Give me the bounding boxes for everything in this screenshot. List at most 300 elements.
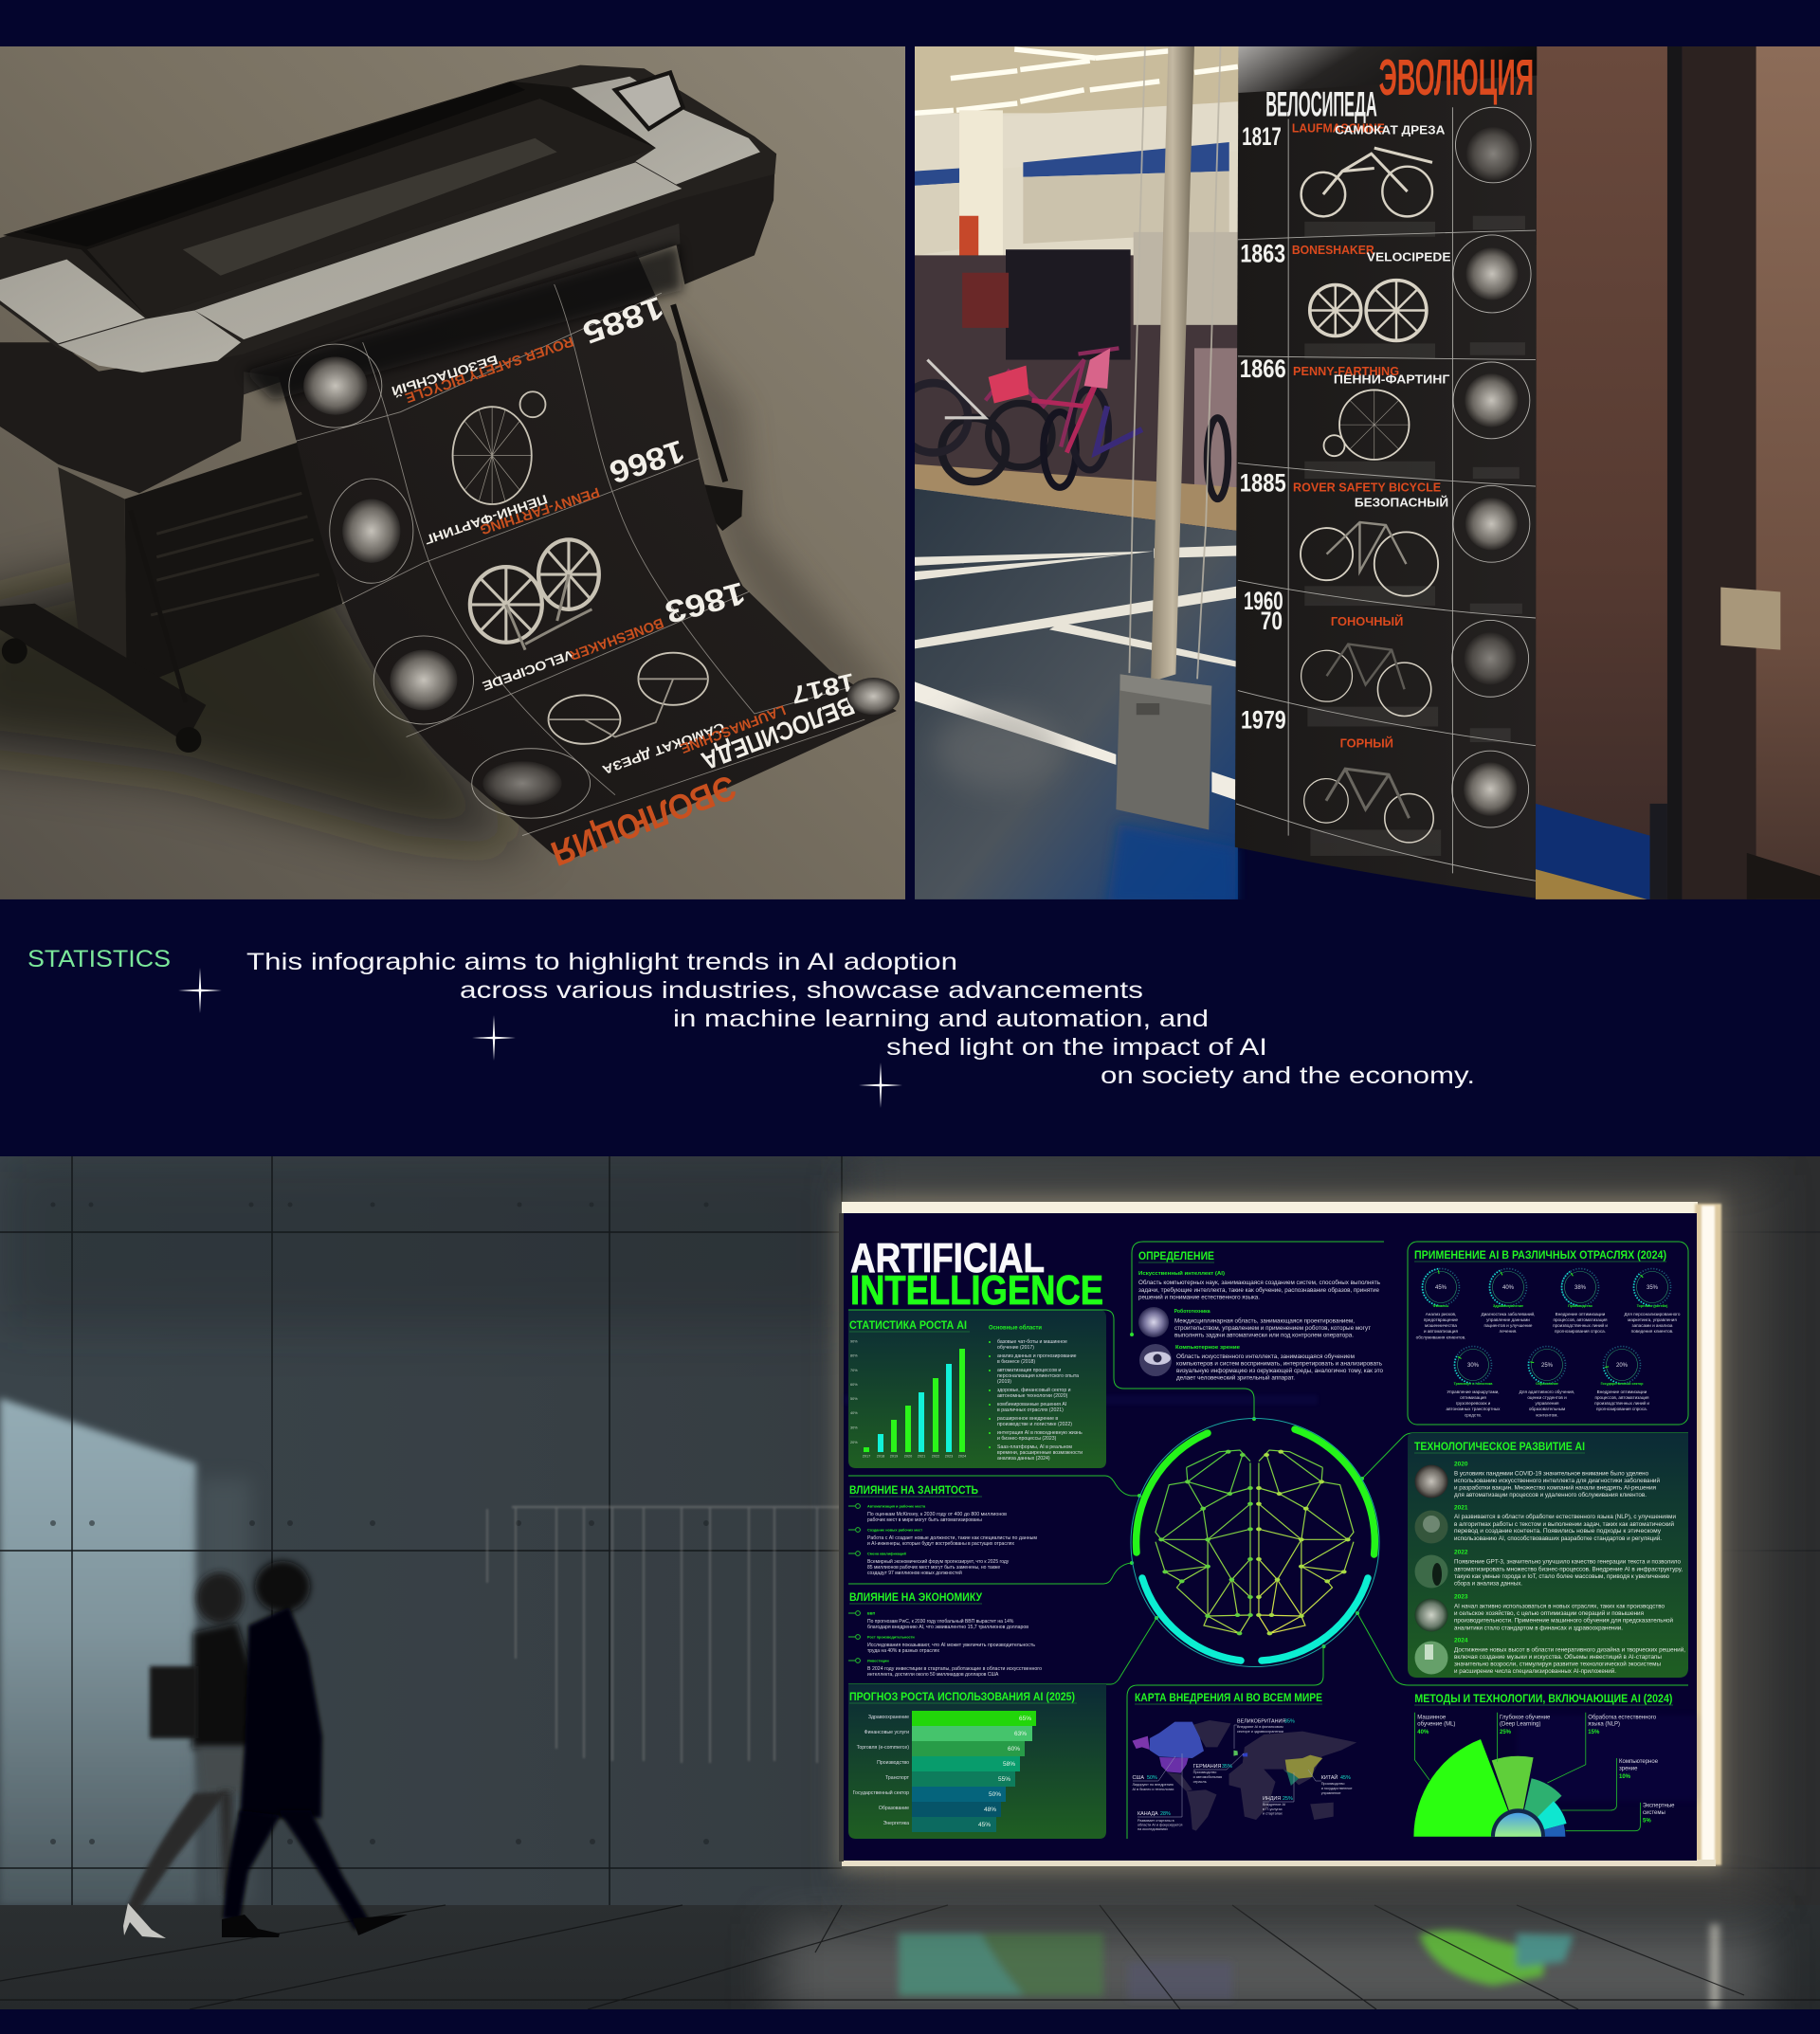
timeline text: и расширение числа специализированных AI-приложений. xyxy=(1454,1668,1616,1675)
panel: AI usage forecast bars: 65% xyxy=(1019,1716,1031,1722)
panel: world adoption map: и государственное xyxy=(1321,1787,1353,1790)
bar chart: 40% xyxy=(850,1411,858,1415)
panel: definition: задачи, требующие интеллекта, такие как обучение, распознавание образов, принятие xyxy=(1138,1286,1379,1294)
timeline text: и сельское хозяйство, с целью оптимизации операций и повышения xyxy=(1454,1610,1644,1617)
chart leader lines xyxy=(1414,1713,1640,1831)
panel: world adoption map: в IT-услугах xyxy=(1263,1807,1283,1811)
gauge descriptions: производственных линий и xyxy=(1553,1322,1608,1328)
gauge: government 20%: 20% xyxy=(1616,1363,1629,1369)
bar chart: 2022 xyxy=(932,1454,939,1458)
panel: definition: строительством, управлением и применением роботов, которые могут xyxy=(1174,1324,1371,1332)
key areas list: базовые чат-боты и машинное xyxy=(997,1339,1067,1345)
panel: AI usage forecast bars: 55% xyxy=(998,1776,1010,1783)
store walls and shelves xyxy=(959,110,1003,258)
bar chart: 2024 xyxy=(958,1454,966,1458)
chart labels: Глубокое обучение xyxy=(1500,1716,1551,1721)
gauge descriptions: процессов, автоматизация xyxy=(1553,1317,1608,1322)
light drip streaks xyxy=(487,1507,842,1763)
panel: world adoption map: и стартапах xyxy=(1263,1812,1283,1816)
gauge labels: Образование xyxy=(1536,1382,1558,1386)
section: impact on employment: ВЛИЯНИЕ НА ЗАНЯТОСТЬ xyxy=(849,1485,978,1497)
gauge descriptions: управления xyxy=(1535,1401,1559,1406)
panel: definition: компьютеров и систем воспринимать, интерпретировать и анализировать xyxy=(1176,1361,1383,1368)
fan chart xyxy=(1413,1739,1567,1837)
timeline text: В условиях пандемии COVID-19 значительное внимание было уделено xyxy=(1454,1471,1649,1478)
section: impact on economy: В 2024 году инвестиции в стартапы, работающие в области искусственного xyxy=(867,1666,1042,1672)
panel: definition: делает человеческий зрительный аппарат. xyxy=(1176,1374,1295,1382)
panel: AI methods and technologies: МЕТОДЫ И ТЕХНОЛОГИИ, ВКЛЮЧАЮЩИЕ AI (2024) xyxy=(1414,1694,1673,1705)
panel: definition: ОПРЕДЕЛЕНИЕ xyxy=(1138,1251,1214,1262)
gauge: healthcare 40%: 40% xyxy=(1502,1285,1515,1291)
panel: definition: Междисциплинарная область, занимающаяся проектированием, xyxy=(1174,1317,1355,1325)
key areas list: персонализация клиентского опыта xyxy=(997,1373,1079,1379)
man xyxy=(222,1561,408,1937)
photo: large format printer with poster: BONESHAKER xyxy=(567,614,665,663)
timeline text: использованию AI, способствовавших разработке стандартов и регуляций. xyxy=(1454,1535,1662,1542)
section: impact on employment: Смена квалификаций xyxy=(867,1553,907,1556)
photo: large format printer with poster: ЭВОЛЮЦИЯ xyxy=(546,768,741,874)
wall tie holes xyxy=(50,1202,709,1844)
bar chart: 2018 xyxy=(877,1454,884,1458)
standing poster title xyxy=(1265,49,1534,123)
timeline text: в алгоритмах работы с текстом и выполнении задач, таких как автоматический xyxy=(1454,1521,1675,1528)
panel: AI usage forecast bars: Транспорт xyxy=(885,1775,910,1781)
gauge: manufacturing 38%: 38% xyxy=(1574,1285,1587,1291)
timeline text: значительно возросли, стимулируя развитие технологической экосистемы xyxy=(1454,1662,1662,1668)
section: impact on employment xyxy=(848,1485,1038,1576)
gauge: healthcare 40% xyxy=(1489,1268,1526,1306)
brain network xyxy=(1156,1450,1354,1635)
panel: world adoption map: Внедрение AI xyxy=(1263,1803,1285,1807)
gauge descriptions: управление данными xyxy=(1486,1317,1530,1322)
security gate pole xyxy=(1151,46,1194,681)
section: impact on employment: 85 миллионов рабочих мест могут быть заменены, но также xyxy=(867,1565,1000,1571)
panel: AI methods and technologies: 40% xyxy=(1417,1730,1429,1735)
timeline years: 2020 xyxy=(1454,1462,1468,1468)
gauge descriptions: поведения клиентов. xyxy=(1631,1329,1673,1334)
panel: world adoption map: 35% xyxy=(1284,1719,1295,1725)
gauge descriptions: и автоматизация xyxy=(1424,1329,1458,1334)
standing poster years: 1866 xyxy=(1240,354,1286,383)
standing poster title: ЭВОЛЮЦИЯ xyxy=(1379,49,1534,106)
panel: AI usage forecast bars xyxy=(848,1684,1106,1839)
panel: technological development timeline xyxy=(1408,1433,1688,1678)
printer touch screen xyxy=(615,73,683,129)
staggered introduction text: on society and the economy. xyxy=(1101,1062,1475,1089)
section: impact on employment: Автоматизация и рабочие места xyxy=(867,1505,926,1509)
photo: poster installed at bicycle shop entrance xyxy=(899,46,1820,905)
wall socket xyxy=(1720,588,1780,650)
timeline years: 2023 xyxy=(1454,1593,1468,1600)
key areas list xyxy=(989,1325,1083,1462)
brain diagram xyxy=(1131,1418,1379,1666)
panel: world adoption map: Производство xyxy=(1193,1771,1216,1774)
rotated poster headings: БЕЗОПАСНЫЙ xyxy=(390,353,500,398)
panel: world adoption map: Внедряют AI в финансовом xyxy=(1237,1725,1283,1729)
panel: AI usage forecast bars: 60% xyxy=(1008,1746,1020,1753)
section: impact on economy: интеллекта, достигли около 50 миллиардов долларов США xyxy=(867,1672,999,1678)
bar chart: 80% xyxy=(850,1353,858,1357)
panel: world adoption map: секторе и здравоохранении xyxy=(1237,1730,1283,1734)
map leader lines xyxy=(1133,1725,1321,1817)
panel: AI usage forecast bars: Государственный сектор xyxy=(853,1789,909,1796)
AI poster xyxy=(844,1213,1697,1861)
woman xyxy=(123,1572,261,1938)
rotated poster headings: 1866 xyxy=(605,432,688,490)
standing poster years: 70 xyxy=(1261,607,1283,635)
section: impact on employment: и AI-инженеры, которые будут востребованы в растущих отраслях xyxy=(867,1541,1014,1547)
gauge descriptions: процессов, автоматизация xyxy=(1594,1395,1649,1400)
panel: AI methods and technologies: 15% xyxy=(1588,1730,1600,1735)
standing poster bicycles xyxy=(1301,148,1438,843)
photo: large format printer with poster: PENNY-FARTHING xyxy=(478,483,601,536)
gauge descriptions: образовательным xyxy=(1529,1407,1565,1411)
section: impact on economy: По прогнозам PwC, к 2030 году глобальный ВВП вырастет на 14% xyxy=(867,1618,1014,1625)
staggered introduction text xyxy=(246,949,1475,1089)
rotated poster headings: 1863 xyxy=(662,574,749,629)
standing poster years: 1817 xyxy=(1242,122,1282,151)
rotated poster headings xyxy=(390,289,858,777)
staggered introduction text: in machine learning and automation, and xyxy=(673,1006,1209,1032)
chart labels: (Deep Learning) xyxy=(1500,1722,1540,1728)
standing poster years: 1885 xyxy=(1240,469,1286,498)
standing poster years: 1960 xyxy=(1244,587,1283,615)
photo: large format printer with poster: LAUFMASCHINE xyxy=(678,701,788,755)
window light patch xyxy=(0,1398,196,1905)
standing poster bicycle names: VELOCIPEDE xyxy=(1367,249,1451,263)
map labels: США xyxy=(1132,1775,1144,1781)
chart labels: Обработка естественного xyxy=(1588,1716,1657,1721)
label: statistics: STATISTICS xyxy=(27,946,171,972)
key areas list: (2019) xyxy=(997,1379,1011,1385)
panel: definition: Область компьютерных наук, занимающаяся созданием систем, способных выполнять xyxy=(1138,1279,1381,1286)
section: impact on employment: рабочих мест в мире могут быть автоматизированы xyxy=(867,1517,982,1523)
map labels: ГЕРМАНИЯ xyxy=(1193,1764,1222,1770)
section: impact on economy xyxy=(848,1592,1042,1678)
gauge descriptions: Внедрение оптимизации xyxy=(1556,1312,1606,1317)
key areas list: времени, расширенные возможности xyxy=(997,1450,1083,1456)
photo: illuminated AI poster on concrete wall xyxy=(0,1156,1820,2019)
key areas list: анализ данных и прогнозирование xyxy=(997,1353,1077,1359)
panel: world adoption map: 45% xyxy=(1340,1775,1351,1781)
thick green arcs xyxy=(1137,1429,1374,1554)
map labels: ВЕЛИКОБРИТАНИЯ xyxy=(1237,1719,1285,1725)
timeline text: AI начал активно использоваться в новых отраслях, таких как производство xyxy=(1454,1604,1665,1610)
bar chart: 2023 xyxy=(945,1454,953,1458)
gauge labels xyxy=(1433,1304,1668,1386)
gauge: education 25% xyxy=(1528,1346,1566,1384)
poster bicycle wheels xyxy=(453,391,708,744)
store floor and markings xyxy=(915,464,1238,531)
gauge: retail 35% xyxy=(1633,1268,1670,1306)
gauge descriptions: Анализ рисков, xyxy=(1426,1312,1456,1317)
store ceiling and lights xyxy=(910,46,1241,113)
gauge descriptions: запасами и анализа xyxy=(1632,1323,1673,1328)
gauge descriptions: автономных транспортных xyxy=(1447,1407,1501,1411)
gauge labels: Транспорт и логистика xyxy=(1454,1382,1493,1386)
panel: world adoption map: на исследованиях xyxy=(1138,1827,1168,1831)
panel: AI across industries 2024: ПРИМЕНЕНИЕ AI В РАЗЛИЧНЫХ ОТРАСЛЯХ (2024) xyxy=(1414,1250,1666,1262)
map labels: КИТАЙ xyxy=(1321,1773,1338,1781)
panel: AI usage forecast bars: Энергетика xyxy=(883,1821,909,1826)
gauge labels: Производство xyxy=(1568,1304,1593,1308)
icon: robot photo xyxy=(1138,1307,1169,1337)
gauge descriptions: прогнозирования спроса. xyxy=(1596,1407,1647,1411)
standing poster bicycle names: БЕЗОПАСНЫЙ xyxy=(1355,495,1448,509)
standing poster xyxy=(1235,46,1537,899)
section: impact on economy: ВЛИЯНИЕ НА ЭКОНОМИКУ xyxy=(849,1592,983,1604)
gauge labels: Здравоохранение xyxy=(1493,1304,1523,1308)
gauge descriptions: обслуживания клиентов. xyxy=(1416,1335,1465,1340)
gauge descriptions: оптимизация xyxy=(1460,1395,1486,1400)
timeline text: автоматизировать множество бизнес-процессов. Внедрение AI в инфраструктуру, xyxy=(1454,1566,1683,1572)
standing poster bicycle names: ГОНОЧНЫЙ xyxy=(1331,614,1403,628)
gauge descriptions: прогнозирования спроса. xyxy=(1555,1329,1606,1334)
panel: definition xyxy=(1138,1251,1383,1382)
poster rules xyxy=(296,284,864,836)
panel: world adoption map: 50% xyxy=(1147,1775,1157,1781)
section: impact on economy: Инвестиции xyxy=(867,1659,889,1662)
bar chart: 60% xyxy=(850,1383,858,1387)
key areas list: Основные области xyxy=(989,1325,1042,1331)
icon: sparkle star xyxy=(859,1062,902,1108)
panel: definition: Компьютерное зрение xyxy=(1175,1345,1240,1351)
key areas list: интеграция AI в повседневную жизнь xyxy=(997,1430,1083,1436)
standing poster bicycle names: BONESHAKER xyxy=(1292,243,1374,257)
gauge: retail 35%: 35% xyxy=(1647,1285,1659,1291)
bar chart: 20% xyxy=(850,1441,858,1444)
gauge descriptions: Диагностика заболеваний, xyxy=(1482,1311,1535,1317)
timeline text: аналитики стало стандартом в финансах и здравоохранении. xyxy=(1454,1625,1623,1631)
gauge: transport 30% xyxy=(1454,1346,1492,1384)
panel: world adoption map: Производство xyxy=(1321,1782,1344,1786)
outer ring xyxy=(1131,1418,1379,1666)
bar chart: 2020 xyxy=(904,1454,912,1458)
timeline text: такую как умные города и IoT, стало более массовым, приводя к увеличению xyxy=(1454,1573,1669,1580)
panel: world adoption map: 28% xyxy=(1160,1811,1171,1817)
standing poster years xyxy=(1240,122,1286,734)
bar chart: 50% xyxy=(850,1397,858,1401)
section: impact on employment: Всемирный экономический форум прогнозирует, что к 2025 году xyxy=(867,1558,1010,1565)
section: impact on employment: создадут 97 миллионов новых должностей xyxy=(867,1570,962,1576)
poster title xyxy=(850,1235,1103,1314)
panel: definition: Робототехника xyxy=(1174,1308,1210,1315)
staggered introduction text: across various industries, showcase advancements xyxy=(460,977,1143,1004)
gauge descriptions: лечения. xyxy=(1500,1329,1517,1334)
gauge descriptions: мошенничества xyxy=(1425,1323,1457,1328)
timeline text: производительности. Применение машинного обучения для предсказательной xyxy=(1454,1618,1674,1625)
panel: definition: Область искусственного интеллекта, занимающаяся обучением xyxy=(1176,1353,1355,1360)
timeline text: Достижение новых высот в области генеративного дизайна и творческих решений, xyxy=(1454,1646,1685,1653)
panel: world adoption map: области AI и фокусируется xyxy=(1138,1824,1182,1827)
rotated poster headings: VELOCIPEDE xyxy=(481,647,575,693)
walking couple silhouettes xyxy=(123,1561,408,1938)
panel: AI methods and technologies: 10% xyxy=(1619,1774,1631,1780)
icon: eye photo xyxy=(1139,1344,1172,1376)
gauge descriptions: Для адаптивного обучения, xyxy=(1520,1389,1574,1394)
bar chart xyxy=(850,1340,966,1458)
standing poster bicycle names: LAUFMASCHINE xyxy=(1292,121,1385,136)
chart labels: языка (NLP) xyxy=(1588,1722,1620,1728)
gauge descriptions: предотвращение xyxy=(1424,1317,1459,1322)
standing poster bicycle names: ROVER SAFETY BICYCLE xyxy=(1293,481,1442,495)
panel: AI methods and technologies: 25% xyxy=(1500,1730,1512,1735)
printer stand xyxy=(125,441,342,681)
printer lid xyxy=(3,82,656,318)
gauge descriptions: средств. xyxy=(1465,1412,1482,1418)
rotated poster headings: САМОКАТ ДРЕЗА xyxy=(600,719,726,777)
rotated poster headings: 1817 xyxy=(789,667,858,708)
children's bicycles xyxy=(899,348,1228,499)
gauge descriptions: контентом. xyxy=(1536,1412,1558,1418)
panel: definition: решений и понимание естественного языка. xyxy=(1138,1294,1260,1301)
timeline years: 2024 xyxy=(1454,1637,1468,1644)
key areas list: в бизнесе (2018) xyxy=(997,1359,1035,1365)
panel: world adoption map: Развивает стартапы в xyxy=(1138,1819,1174,1823)
gauge: transport 30%: 30% xyxy=(1467,1363,1480,1369)
panel: AI usage forecast bars: Производство xyxy=(877,1760,909,1766)
gauge descriptions: Для персонализированного xyxy=(1625,1312,1681,1317)
panel: AI usage forecast bars: Здравоохранение xyxy=(868,1715,909,1720)
key areas list: производстве и логистике (2022) xyxy=(997,1422,1072,1427)
key areas list: в различных отраслях (2021) xyxy=(997,1407,1064,1413)
panel: AI usage forecast bars: 45% xyxy=(978,1822,991,1828)
standing poster years: 1863 xyxy=(1240,240,1285,268)
panel: AI growth statistics xyxy=(848,1310,1106,1468)
bar chart: 2019 xyxy=(890,1454,898,1458)
timeline photos xyxy=(1414,1465,1448,1674)
panel: AI usage forecast bars: Финансовые услуги xyxy=(864,1730,909,1735)
gauge descriptions: производственных линий и xyxy=(1594,1400,1649,1406)
printer grey panels xyxy=(0,260,145,343)
heading: СТАТИСТИКА РОСТА AI xyxy=(849,1320,967,1332)
poster title: ARTIFICIAL xyxy=(850,1235,1045,1281)
section: impact on economy: Исследования показывают, что AI может увеличить производительность xyxy=(867,1643,1035,1648)
rotated poster headings: ПЕННИ-ФАРТИНГ xyxy=(423,492,549,547)
photo: large format printer with poster: ROVER SAFETY BICYCLE xyxy=(403,333,575,405)
chart labels: обучение (ML) xyxy=(1417,1722,1455,1728)
panel: world adoption map: AI в бизнес и технологии xyxy=(1132,1788,1174,1791)
panel: AI usage forecast bars: 63% xyxy=(1014,1731,1027,1737)
panel: definition: Искусственный интеллект (AI) xyxy=(1138,1270,1225,1277)
panel: world adoption map: Лидируют по внедрению xyxy=(1132,1783,1174,1787)
rotated poster headings: 1885 xyxy=(578,289,668,350)
section: impact on economy: труда на 40% в разных отраслях xyxy=(867,1648,939,1654)
panel: world adoption map xyxy=(1132,1693,1356,1831)
panel: AI usage forecast bars: 48% xyxy=(984,1807,996,1813)
map labels xyxy=(1132,1719,1338,1817)
staggered introduction text: shed light on the impact of AI xyxy=(886,1034,1267,1061)
standing poster title: ВЕЛОСИПЕДА xyxy=(1265,84,1377,123)
key areas list: здоровье, финансовый сектор и xyxy=(997,1387,1071,1393)
wall panel seams xyxy=(0,1156,1820,1905)
poster light frame xyxy=(837,1197,1723,1870)
chart labels: Машинное xyxy=(1417,1716,1447,1721)
standing poster rules xyxy=(1236,107,1536,881)
panel: AI usage forecast bars: 58% xyxy=(1003,1761,1015,1768)
panel: world adoption map: и автомобильная xyxy=(1193,1775,1222,1779)
printed poster sheet xyxy=(241,250,897,862)
key areas list: расширенное внедрение в xyxy=(997,1416,1058,1422)
key areas list: обучение (2017) xyxy=(997,1345,1034,1351)
horizontal bars xyxy=(912,1711,1036,1832)
bar chart: 2021 xyxy=(918,1454,925,1458)
gauge descriptions: пациентов и улучшение xyxy=(1484,1323,1533,1328)
timeline text: AI развивается в области обработки естественного языка (NLP), с улучшениями xyxy=(1454,1514,1677,1520)
standing poster bicycle names: САМОКАТ ДРЕЗА xyxy=(1335,122,1445,136)
store clothing racks xyxy=(910,255,1241,487)
section: impact on employment: Работа с AI создает новые должности, такие как специалисты по данным xyxy=(867,1535,1038,1541)
timeline text: перевод и создание контента. Появились новые подходы к этическому xyxy=(1454,1528,1662,1535)
timeline years xyxy=(1454,1462,1468,1644)
panel: AI usage forecast bars: Образование xyxy=(879,1806,909,1811)
timeline text: и разработки вакцин. Множество компаний начали внедрять AI-решения xyxy=(1454,1485,1656,1492)
floor shadow xyxy=(0,522,534,847)
printer body xyxy=(0,169,774,493)
timeline text xyxy=(1454,1471,1685,1675)
bar chart: 30% xyxy=(850,1426,858,1429)
security gate base xyxy=(1116,674,1211,829)
standing poster bicycle names: PENNY-FARTHING xyxy=(1293,364,1399,378)
chart labels xyxy=(1417,1716,1675,1816)
poster title: INTELLIGENCE xyxy=(850,1267,1103,1314)
gauge descriptions: маркетинга, управления xyxy=(1628,1317,1677,1322)
key areas list: автономные технологии (2020) xyxy=(997,1393,1068,1399)
timeline text: сбора и анализа данных. xyxy=(1454,1580,1522,1587)
key areas list: автоматизация процессов и xyxy=(997,1368,1061,1373)
standing poster portraits xyxy=(1452,107,1531,827)
panel: world adoption map: КАРТА ВНЕДРЕНИЯ AI ВО ВСЕМ МИРЕ xyxy=(1135,1693,1322,1704)
gauge: finance 45% xyxy=(1422,1268,1460,1306)
chart labels: Компьютерное xyxy=(1619,1759,1659,1765)
standing poster years: 1979 xyxy=(1241,705,1286,734)
chart labels: Экспертные xyxy=(1643,1804,1675,1809)
floor joints xyxy=(0,1905,1820,2009)
standing poster bicycle names xyxy=(1292,121,1451,751)
section: impact on economy: ВВП xyxy=(867,1611,875,1615)
standing poster caption blocks xyxy=(1304,216,1525,856)
thick teal arcs xyxy=(1142,1578,1368,1661)
gauge labels: Финансы xyxy=(1433,1304,1448,1308)
heading: ПРОГНОЗ РОСТА ИСПОЛЬЗОВАНИЯ AI (2025) xyxy=(849,1692,1075,1703)
gauge descriptions: грузоперевозок и xyxy=(1456,1401,1491,1406)
panel: definition: выполнять задачи автоматически или под контролем оператора. xyxy=(1174,1333,1354,1339)
panel: world adoption map: отрасль xyxy=(1193,1780,1207,1784)
section: impact on economy: благодаря внедрению AI, что эквивалентно 15,7 триллионов долларов xyxy=(867,1625,1028,1630)
chart labels: системы xyxy=(1643,1810,1665,1816)
floor reflections of poster xyxy=(899,1924,1720,2009)
key areas list: и бизнес-процессы (2023) xyxy=(997,1436,1057,1442)
connector lines between sections and brain xyxy=(848,1242,1688,1839)
standing poster bicycle names: ПЕННИ-ФАРТИНГ xyxy=(1334,372,1450,387)
rotated poster headings: ВЕЛОСИПЕДА xyxy=(698,691,858,775)
bar chart: 2017 xyxy=(863,1454,870,1458)
floor xyxy=(0,1905,1820,2009)
section: impact on economy: Рост производительности xyxy=(867,1636,915,1640)
gauge: education 25%: 25% xyxy=(1541,1363,1554,1369)
gauge descriptions: Управление маршрутами, xyxy=(1447,1389,1500,1394)
timeline text: для автоматизации процессов и удаленного обслуживания клиентов. xyxy=(1454,1492,1647,1498)
gauge descriptions xyxy=(1416,1311,1681,1418)
map labels: КАНАДА xyxy=(1138,1811,1158,1817)
gauge descriptions: оценки студентов и xyxy=(1527,1395,1567,1400)
panel: technological development timeline: ТЕХНОЛОГИЧЕСКОЕ РАЗВИТИЕ AI xyxy=(1414,1442,1585,1453)
poster round photos xyxy=(289,344,900,818)
bar chart: 70% xyxy=(850,1369,858,1372)
panel: AI methods and technologies xyxy=(1413,1694,1675,1837)
gauge: finance 45%: 45% xyxy=(1435,1285,1447,1291)
chart labels: зрение xyxy=(1619,1767,1638,1772)
